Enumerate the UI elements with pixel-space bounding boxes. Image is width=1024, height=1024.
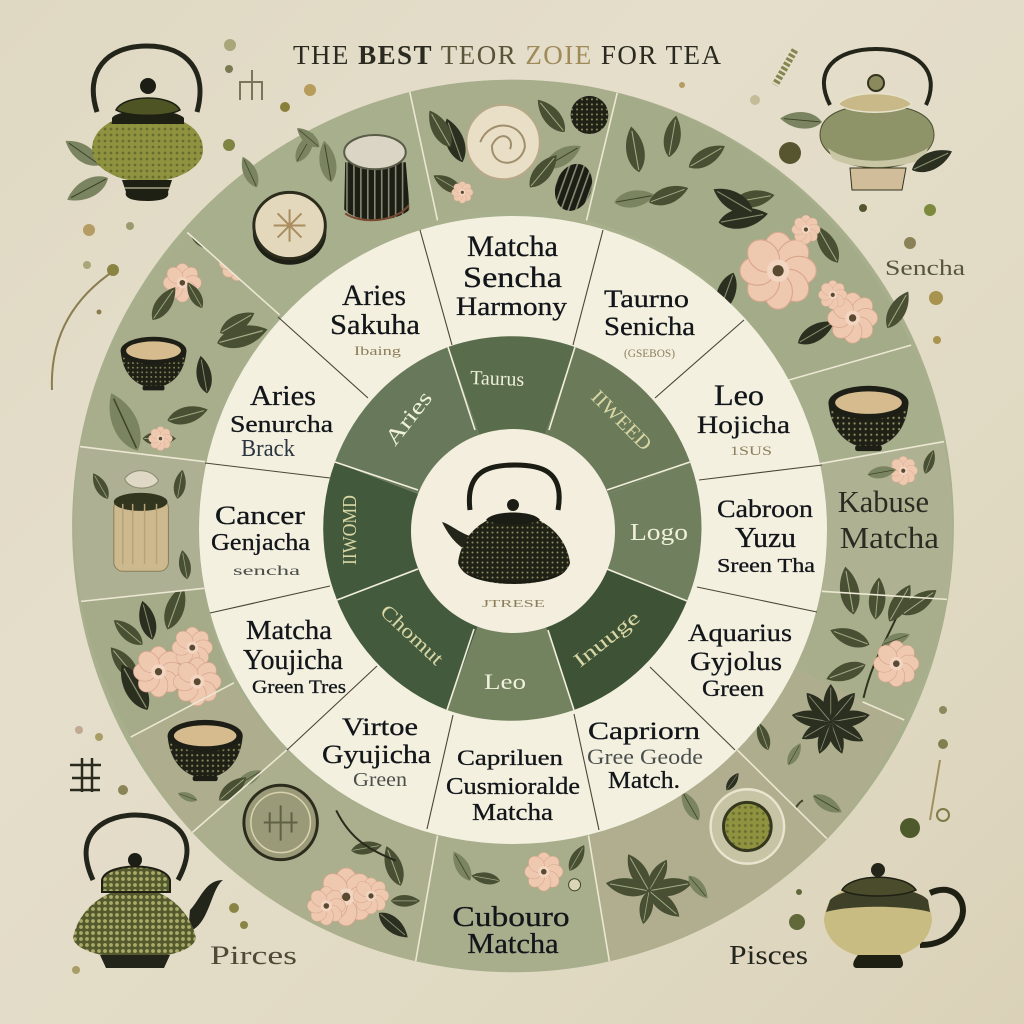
sector: Taurus <box>448 336 575 530</box>
panel: left flowers <box>81 583 234 737</box>
sector: Capriorn Gree Geode: Capriorn <box>588 718 701 745</box>
sector: Matcha Sencha Harmony <box>456 230 567 321</box>
panel: tea plant <box>795 565 947 720</box>
sector: Matcha Sencha Harmony: Matcha <box>467 230 558 263</box>
sector: Taurno Senicha: (GSEBOS) <box>624 346 675 360</box>
label: Cubouro: Cubouro <box>452 902 570 933</box>
teapot: top right sage <box>779 49 956 190</box>
sector: Cancer Genjacha <box>211 501 310 579</box>
scattered herb specks <box>52 39 949 974</box>
cream tea name ring <box>199 216 827 844</box>
sector dividers <box>335 347 690 710</box>
sector: Virtoe Gyujicha: Gyujicha <box>322 740 432 769</box>
sector: Matcha Sencha Harmony: Harmony <box>456 292 567 321</box>
sector: Leo Hojicha: 1SUS <box>730 443 772 458</box>
sector: Capriluen Cusmioralde: Matcha <box>472 800 553 826</box>
sector: Aquarius Gyjolus: Aquarius <box>688 620 792 647</box>
sector: Aries Senurcha: Brack <box>241 436 295 462</box>
panel: lower left bowl <box>131 683 287 833</box>
sector: Cancer Genjacha: Cancer <box>215 501 305 530</box>
sector: Virtoe Gyujicha: Green <box>353 769 407 791</box>
sector: Cabroon Yuzu: Cabroon <box>717 496 814 523</box>
panel: lower right herbs <box>588 750 827 961</box>
sector: Leo Hojicha: Hojicha <box>697 412 790 439</box>
sector: Matcha Youjicha: Youjicha <box>243 645 344 676</box>
sector: Cancer Genjacha: sencha <box>233 564 301 579</box>
icon: tea bowl <box>828 386 909 451</box>
sector: Capriluen Cusmioralde: Capriluen <box>457 745 563 770</box>
sector: Aries Sakuha <box>330 279 421 358</box>
sector: Capriluen Cusmioralde: Cusmioralde <box>446 774 580 800</box>
sector: Leo: Leo <box>484 669 526 694</box>
panel: left jar <box>74 447 205 601</box>
sector: Cabroon Yuzu <box>717 496 815 577</box>
sector: lower left: Chomut <box>376 601 448 670</box>
panel: upper left flowers and bowl <box>80 231 280 462</box>
icon: glass jar <box>114 471 168 571</box>
sector: Taurno Senicha: Senicha <box>604 312 695 341</box>
sector: Matcha Youjicha <box>243 615 346 698</box>
centre disc <box>411 429 615 633</box>
outer decorative ring <box>72 80 954 972</box>
sector: Aries Sakuha: Ibaing <box>354 343 402 358</box>
sector: Taurno Senicha <box>604 286 695 360</box>
ring dividers <box>80 92 947 961</box>
sector: upper right: IIWEED <box>586 386 656 455</box>
centre medallion <box>411 429 615 633</box>
label: Matcha: Matcha <box>467 929 559 960</box>
sector: Matcha Sencha Harmony: Sencha <box>463 261 562 294</box>
sector: Aries Sakuha: Sakuha <box>330 310 421 341</box>
sector: Aries <box>335 347 513 530</box>
icon: tea bowl <box>168 720 243 781</box>
sector: Capriorn Gree Geode: Gree Geode <box>587 744 703 769</box>
sector: Aries Senurcha: Aries <box>250 381 316 412</box>
icon: black tea jar <box>344 135 410 220</box>
icon: round tea dish <box>711 789 784 864</box>
ring background <box>199 216 827 844</box>
sector: Taurus: Taurus <box>470 367 525 391</box>
icon: calligraphy mark <box>70 758 101 792</box>
sector: Cancer Genjacha: Genjacha <box>211 530 310 556</box>
sector: lower right: Inuuge <box>570 606 645 672</box>
sector: Aries: Aries <box>379 386 437 450</box>
panel: top rose <box>410 80 617 220</box>
sector: Logo: Logo <box>630 520 688 546</box>
sector: left: IIWOMD <box>339 495 361 565</box>
sector: Virtoe Gyujicha: Virtoe <box>342 714 418 741</box>
sector: Aquarius Gyjolus <box>688 620 792 701</box>
sector: Virtoe Gyujicha <box>322 714 432 791</box>
sector: Logo <box>513 462 701 601</box>
sector: lower left <box>337 530 513 710</box>
icon: dish of tea leaves <box>253 192 326 265</box>
sector: Aries Sakuha: Aries <box>342 279 406 312</box>
sector: Taurno Senicha: Taurno <box>604 286 689 313</box>
sector: Matcha Youjicha: Green Tres <box>252 677 346 698</box>
teapot: bottom right tan cup <box>824 863 963 968</box>
sector: Cabroon Yuzu: Yuzu <box>735 523 796 554</box>
label: Kabuse: Kabuse <box>838 486 929 519</box>
sector: Aries Senurcha: Senurcha <box>230 412 333 438</box>
small caption: JTRESE <box>482 598 545 610</box>
sector dividers <box>205 230 822 830</box>
sector: Aquarius Gyjolus: Green <box>702 676 765 701</box>
sector: Capriorn Gree Geode <box>587 718 703 794</box>
panel: coin and peony <box>192 750 438 961</box>
teapot: top left olive <box>61 46 203 208</box>
green zodiac ring <box>323 336 701 721</box>
sector: Aries Senurcha <box>230 381 333 462</box>
sector: Leo Hojicha <box>697 379 790 458</box>
sector: upper right <box>513 347 690 530</box>
label: Matcha: Matcha <box>840 522 939 555</box>
sector: left <box>323 462 513 600</box>
panel: bowl right <box>788 345 944 464</box>
sector: Matcha Youjicha: Matcha <box>246 615 332 645</box>
sector: Cabroon Yuzu: Sreen Tha <box>717 555 815 577</box>
sector: Aquarius Gyjolus: Gyjolus <box>690 647 782 676</box>
panel: black flower <box>737 668 904 841</box>
icon: black cast iron teapot <box>442 465 570 584</box>
label: Sencha: Sencha <box>885 255 965 280</box>
panel: Kabuse Matcha <box>820 442 952 599</box>
title: THE BEST TEOR ZOIE FOR TEA <box>293 40 722 70</box>
label: Pirces: Pirces <box>210 941 297 970</box>
icon: tea bowl <box>121 337 186 390</box>
panel: bottom Cubouro Matcha <box>416 836 609 972</box>
panel: top right flowers <box>586 93 915 411</box>
sector: Leo Hojicha: Leo <box>714 379 764 412</box>
label: Pisces: Pisces <box>729 940 808 970</box>
sector: Capriluen Cusmioralde <box>446 745 580 826</box>
teapot: bottom left dotted <box>73 815 223 968</box>
sector: Leo <box>447 530 574 721</box>
sector: lower right <box>513 530 687 710</box>
sector: Capriorn Gree Geode: Match. <box>608 768 680 794</box>
panel: upper left jar and dish <box>187 92 438 315</box>
base disc of the ring <box>72 80 954 972</box>
icon: engraved coin <box>244 785 317 860</box>
